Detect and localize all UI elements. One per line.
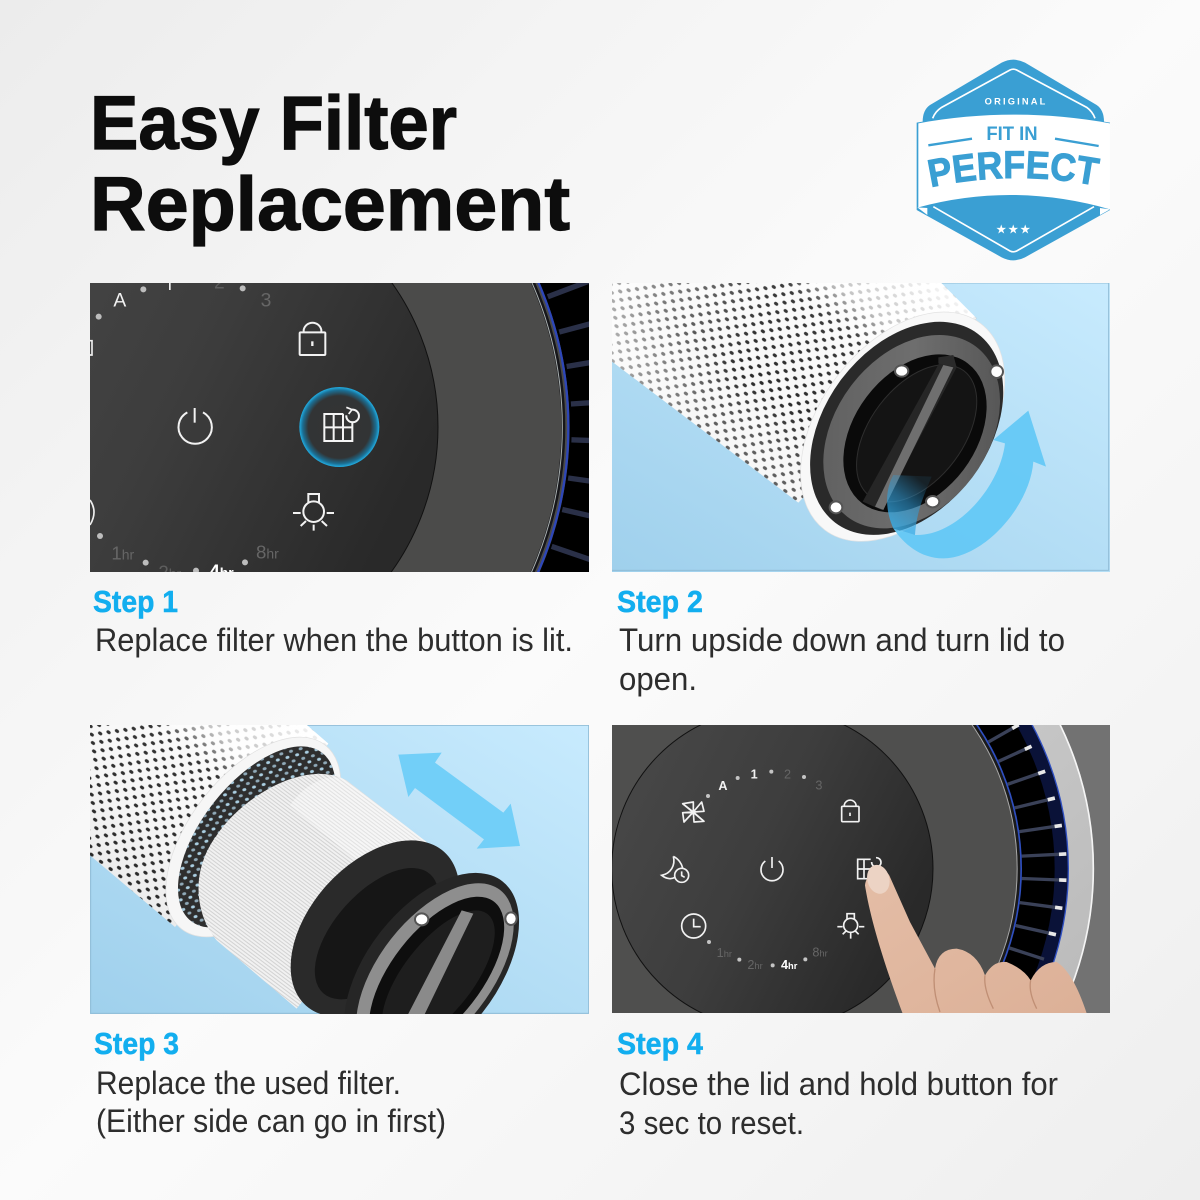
lid handle bbox=[863, 362, 957, 510]
lid gasket bbox=[347, 872, 520, 1014]
grey lid ring bbox=[823, 335, 1000, 528]
partial icons at left edge bbox=[90, 341, 94, 525]
step 4 description: 3 sec to reset. bbox=[619, 1105, 804, 1141]
title bbox=[90, 81, 570, 247]
light outer ring bbox=[1033, 725, 1094, 980]
perforated filter housing bbox=[90, 725, 328, 927]
step 2 description: open. bbox=[619, 661, 697, 697]
icon: lock bbox=[842, 800, 859, 822]
filter black gasket bbox=[290, 840, 458, 1014]
icon: light bulb bbox=[293, 494, 334, 531]
white pegs bbox=[415, 912, 517, 925]
white rim bbox=[800, 312, 1005, 542]
badge: original fit in perfect: FIT IN bbox=[986, 124, 1038, 145]
pleated filter cylinder bbox=[199, 774, 427, 1009]
perforated filter housing bbox=[612, 283, 976, 502]
speed and timer scale: 1hr bbox=[717, 946, 732, 960]
speed scale labels: 4hr bbox=[209, 561, 234, 582]
step 3 heading: Step 3 bbox=[94, 1026, 179, 1061]
step 3 description bbox=[96, 1065, 446, 1139]
step 3 description: (Either side can go in first) bbox=[96, 1103, 446, 1139]
speed scale labels: 3 bbox=[261, 290, 271, 311]
grey lid ring bbox=[356, 883, 514, 1014]
double-headed arrow bbox=[398, 753, 520, 849]
control disc bbox=[612, 725, 934, 1013]
step 4 description bbox=[619, 1066, 1058, 1141]
step 1 description: Replace filter when the button is lit. bbox=[95, 622, 573, 658]
lid handle bbox=[407, 910, 473, 1017]
icon: light bulb bbox=[837, 914, 864, 939]
vent ring bbox=[1018, 725, 1068, 974]
title: Replacement bbox=[90, 162, 570, 247]
rotation arrow bbox=[887, 411, 1046, 558]
control disc bbox=[90, 283, 438, 572]
speed and timer scale: 2 bbox=[784, 768, 791, 782]
speed and timer scale: A bbox=[718, 779, 727, 793]
white rim bbox=[166, 736, 341, 938]
inner opening bbox=[843, 354, 987, 512]
speed scale labels bbox=[96, 273, 279, 582]
icon: power bbox=[178, 408, 212, 444]
panel: step 4 press reset photo bbox=[612, 725, 1110, 1013]
icon: sleep timer bbox=[662, 856, 689, 882]
step 1 heading: Step 1 bbox=[93, 584, 178, 619]
badge: original fit in perfect: ★★★ bbox=[996, 222, 1031, 236]
speed scale labels: A bbox=[113, 291, 126, 312]
badge: original fit in perfect: PERFECT bbox=[928, 150, 1101, 188]
step 3 description: Replace the used filter. bbox=[96, 1065, 401, 1101]
step 4 description: Close the lid and hold button for bbox=[619, 1066, 1058, 1102]
step 2 heading: Step 2 bbox=[617, 584, 703, 619]
inner perforated sleeve bbox=[178, 746, 335, 928]
speed and timer scale: 1 bbox=[751, 768, 758, 782]
icon: fan off bbox=[683, 802, 704, 822]
speed and timer scale: 8hr bbox=[812, 946, 828, 960]
white pegs bbox=[830, 365, 1003, 513]
step 2 description bbox=[619, 622, 1065, 697]
hand pressing button bbox=[864, 862, 1087, 1015]
speed and timer scale bbox=[706, 768, 828, 972]
icon: filter reset bbox=[858, 858, 881, 879]
speed scale labels: 1hr bbox=[111, 542, 135, 563]
speed and timer scale: 2hr bbox=[747, 958, 763, 972]
icon: clock bbox=[682, 914, 706, 938]
icon: lock bbox=[300, 323, 325, 355]
speed and timer scale: 4hr bbox=[781, 958, 798, 972]
icon: power bbox=[761, 857, 783, 881]
step 2 description: Turn upside down and turn lid to bbox=[619, 622, 1065, 658]
panel: step 2 turn lid photo bbox=[610, 274, 1110, 580]
panel: step 3 replace filter photo bbox=[90, 725, 589, 1014]
panel: step 1 control panel photo bbox=[90, 283, 589, 572]
black gasket bbox=[810, 322, 1004, 535]
badge: original fit in perfect: ORIGINAL bbox=[985, 96, 1046, 106]
step 4 heading: Step 4 bbox=[617, 1026, 704, 1061]
title: Easy Filter bbox=[90, 81, 457, 166]
icon: highlighted filter reset button bbox=[299, 387, 379, 467]
inner opening bbox=[370, 896, 504, 1014]
speed scale labels: 2hr bbox=[158, 561, 182, 582]
speed scale labels: 8hr bbox=[256, 541, 279, 562]
badge: original fit in perfect bbox=[916, 60, 1110, 260]
speed scale labels: 2 bbox=[214, 273, 225, 294]
speed and timer scale: 3 bbox=[815, 778, 822, 792]
